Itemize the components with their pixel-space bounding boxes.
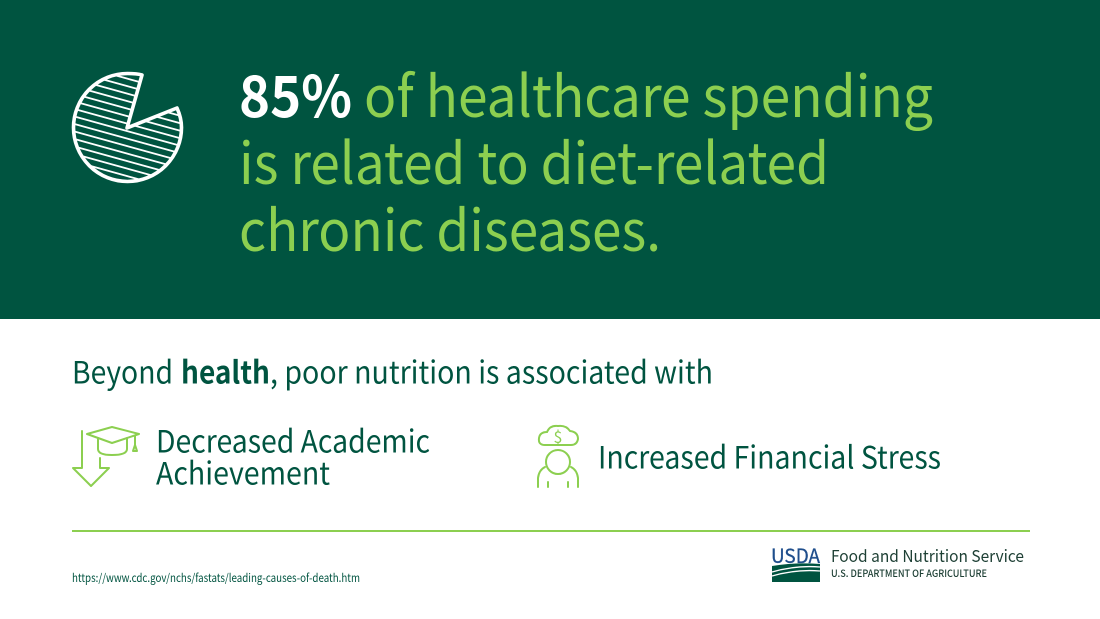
logo text: U.S. Department of Agriculture: U.S. DEPARTMENT OF AGRICULTURE [831,565,987,580]
text: decreased academic achievement: Decreased Academic [156,416,430,462]
heading: headline: is related to diet-related [239,119,829,201]
icon: person with money cloud: $ [554,424,562,448]
icon: pie chart [72,72,184,184]
icon: graduation cap and down arrow [73,427,139,486]
icon: person with money cloud [538,424,578,487]
subheading: , poor nutrition is associated with [270,348,713,392]
text: increased financial stress: Increased Financial Stress [598,432,941,478]
heading: headline: of healthcare spending [364,52,933,134]
panel: green header [0,0,1100,319]
heading: headline: chronic diseases. [239,186,661,268]
text: decreased academic achievement [156,416,430,494]
heading: headline: 85% [239,52,352,134]
USDA logo [771,540,820,582]
logo text: Food and Nutrition Service: Food and Nutrition Service [831,543,1024,567]
divider line [72,530,1030,532]
subheading: Beyond [72,348,173,392]
subheading: health [181,348,270,392]
source url: https://www.cdc.gov/nchs/fastats/leading-causes-of-death.htm [72,570,360,586]
text: decreased academic achievement: Achievement [156,448,330,494]
heading: headline [239,52,933,268]
USDA logo: USDA [771,540,820,569]
subheading [72,348,713,392]
